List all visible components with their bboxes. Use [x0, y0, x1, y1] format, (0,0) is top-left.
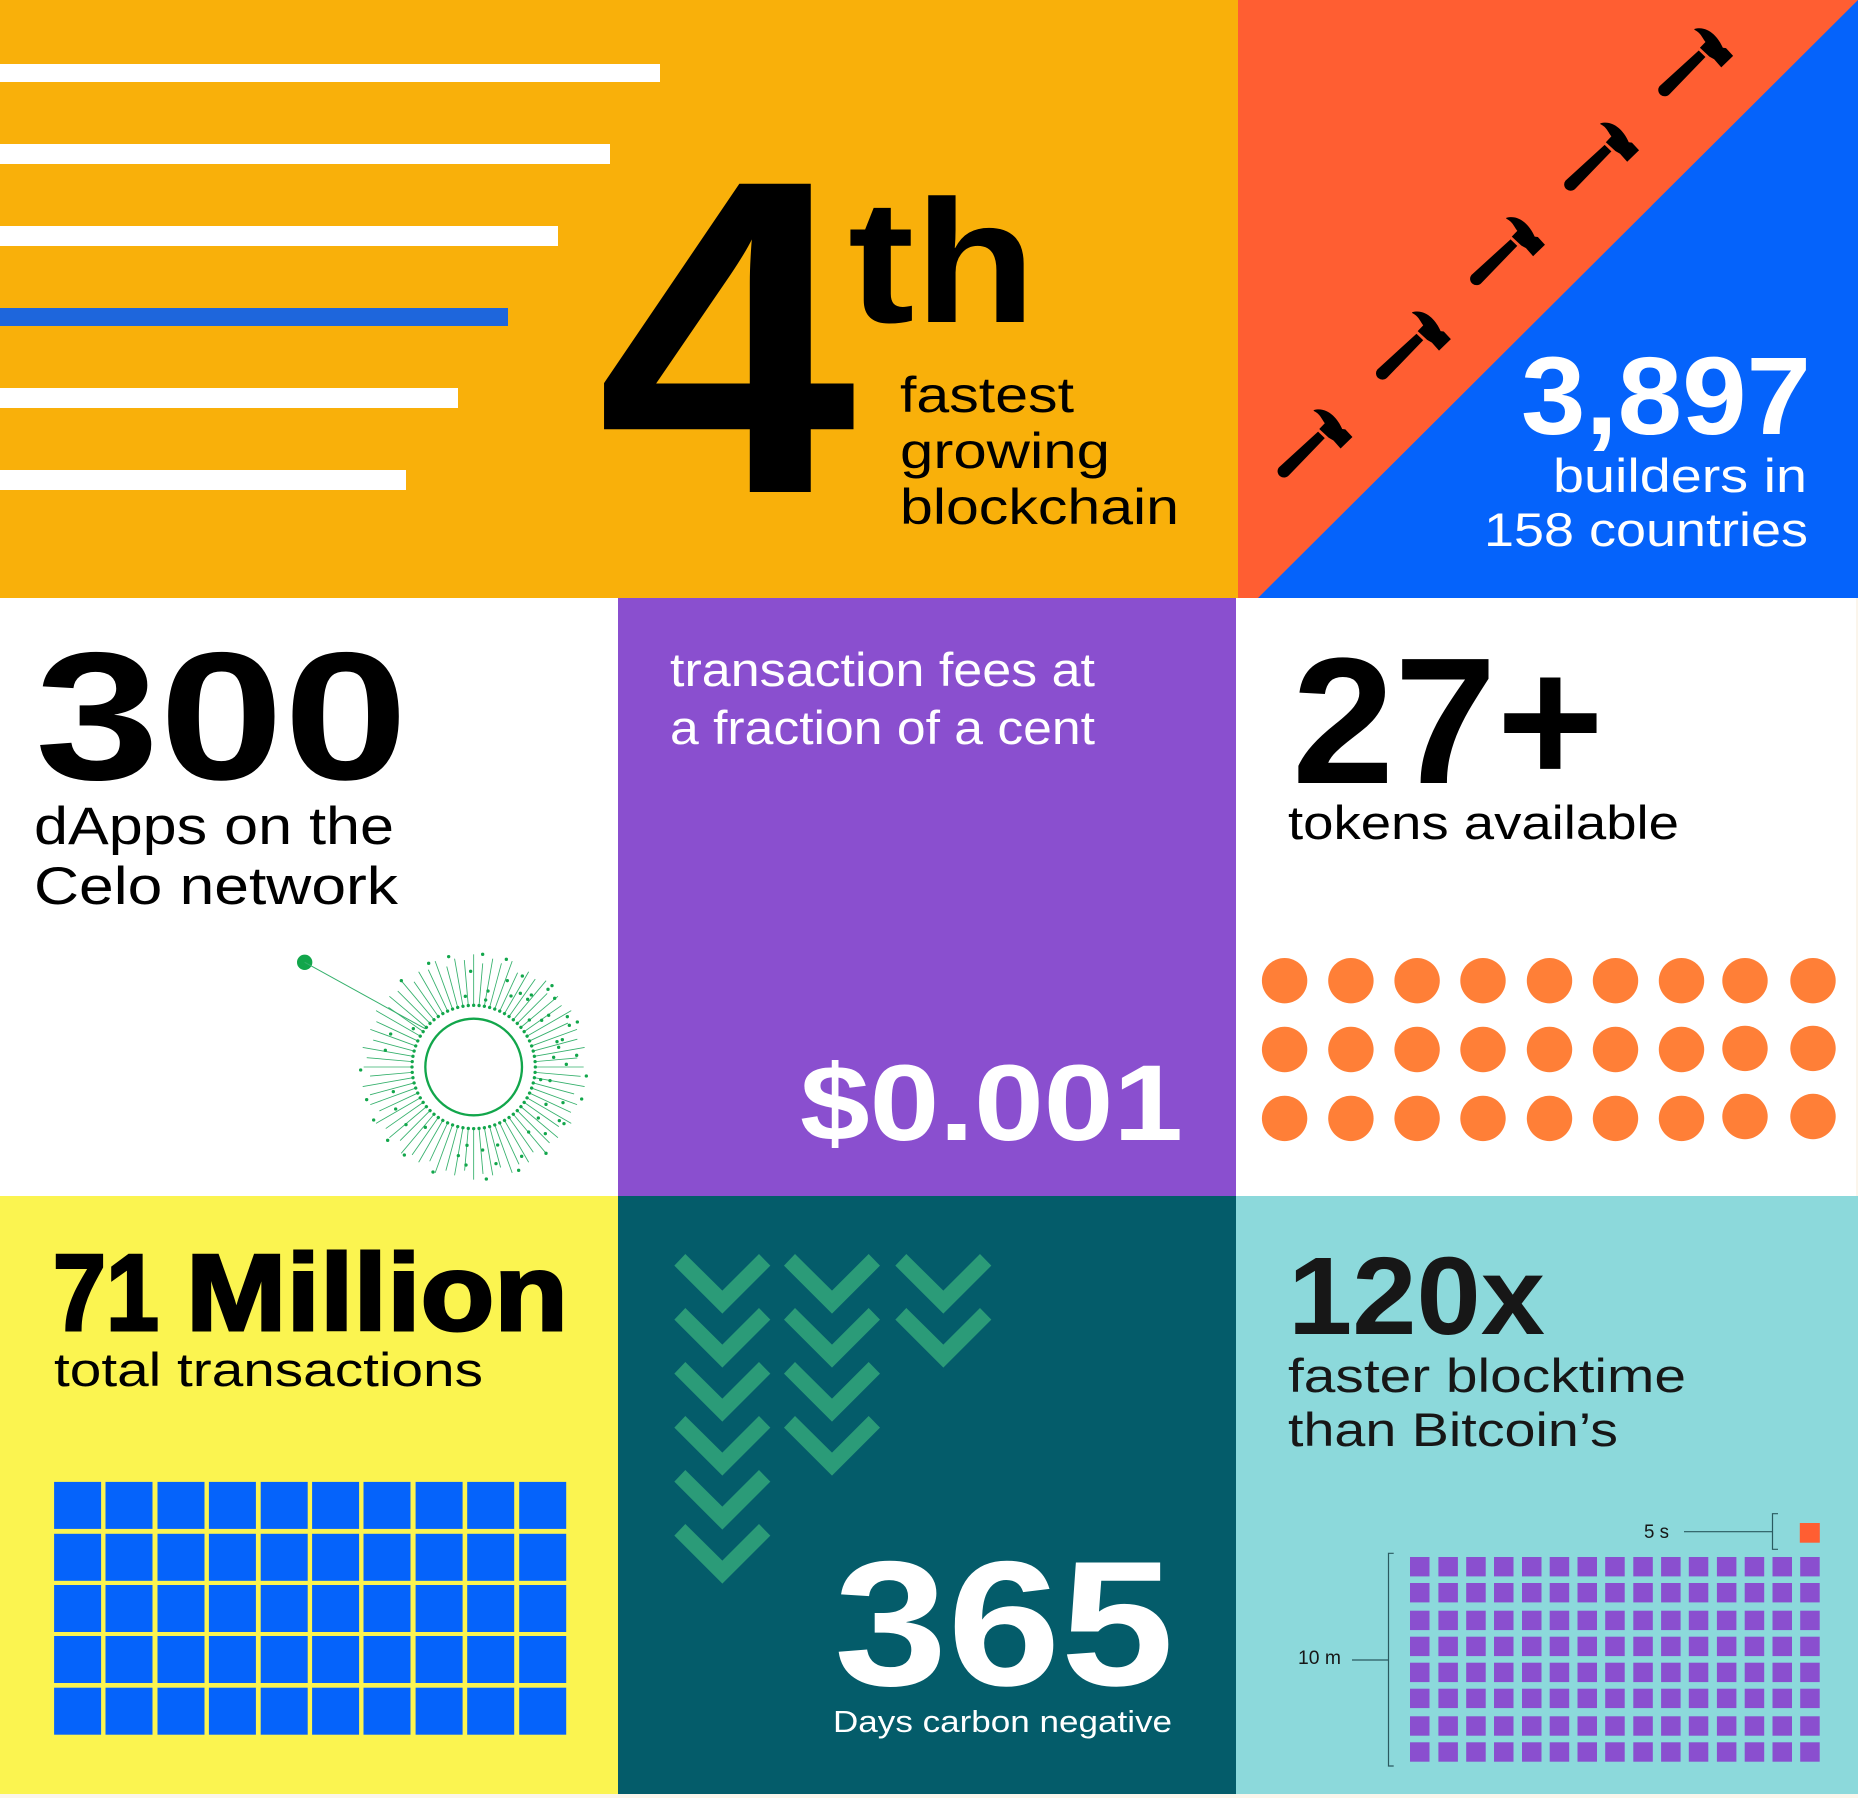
text: dApps on the Celo network: Celo network: [34, 857, 399, 916]
text: transaction fees at a fraction of a cent: transaction fees at: [670, 643, 1095, 696]
stat: 120x: 120x: [1288, 1235, 1545, 1358]
stat: 71 Million: Million: [186, 1232, 568, 1354]
stat: 27+: 27+: [1292, 621, 1604, 822]
text: fastest growing blockchain: blockchain: [900, 479, 1179, 535]
stat: 300: 300: [35, 614, 408, 818]
icon: chevrons: [674, 1254, 991, 1584]
chart: token dots: [1262, 958, 1836, 1141]
text: dApps on the Celo network: [34, 797, 399, 916]
bar ranking chart: [0, 64, 660, 490]
text: tokens available: tokens available: [1288, 796, 1679, 849]
legend: 5 s: 5 s: [1644, 1522, 1669, 1543]
stat: 71 Million: 71: [53, 1232, 159, 1354]
panel: 4th fastest growing blockchain: [0, 0, 1238, 598]
text: dApps on the Celo network: dApps on the: [34, 797, 394, 856]
text: builders in 158 countries: builders in: [1553, 449, 1807, 502]
text: fastest growing blockchain: growing: [900, 423, 1110, 479]
text: builders in 158 countries: [1484, 449, 1808, 556]
panel: 71 Million: [0, 1196, 618, 1794]
stat: 3,897: 3,897: [1521, 335, 1811, 458]
panel: 365 days: [618, 1196, 1236, 1794]
chart: blue grid: [54, 1482, 566, 1735]
panel: 3,897 builders: [1238, 0, 1858, 598]
text: builders in 158 countries: 158 countries: [1484, 503, 1808, 556]
text: Days carbon negative: Days carbon negative: [833, 1704, 1172, 1739]
legend: 10 m: [1298, 1553, 1394, 1766]
heading: 4th: [597, 86, 1036, 587]
stat: 71 Million: [53, 1232, 568, 1354]
legend: 10 m: 10 m: [1298, 1648, 1341, 1669]
text: fastest growing blockchain: [900, 367, 1179, 535]
stat: 365: 365: [834, 1524, 1174, 1723]
stat: $0.001: $0.001: [800, 1042, 1183, 1163]
heading: 4th: 4: [597, 86, 859, 587]
icon: hammers: [1278, 28, 1733, 477]
text: transaction fees at a fraction of a cent: a fraction of a cent: [670, 701, 1095, 754]
text: total transactions: total transactions: [54, 1343, 483, 1396]
text: faster blocktime than Bitcoin's: [1288, 1349, 1686, 1456]
text: faster blocktime than Bitcoin's: than Bitcoin’s: [1288, 1403, 1618, 1456]
panel: transaction fees: [618, 598, 1236, 1196]
legend: 5 s: [1644, 1514, 1820, 1549]
panel: 120x: [1236, 1196, 1858, 1794]
heading: 4th: th: [848, 165, 1036, 360]
panel: 300 dApps: [0, 598, 618, 1196]
text: transaction fees at a fraction of a cent: [670, 643, 1095, 754]
chart: purple squares: [1410, 1557, 1820, 1762]
text: fastest growing blockchain: fastest: [900, 367, 1074, 423]
chart: network burst: [297, 952, 589, 1182]
text: faster blocktime than Bitcoin's: faster blocktime: [1288, 1349, 1686, 1402]
panel: 27+ tokens: [1236, 598, 1856, 1196]
